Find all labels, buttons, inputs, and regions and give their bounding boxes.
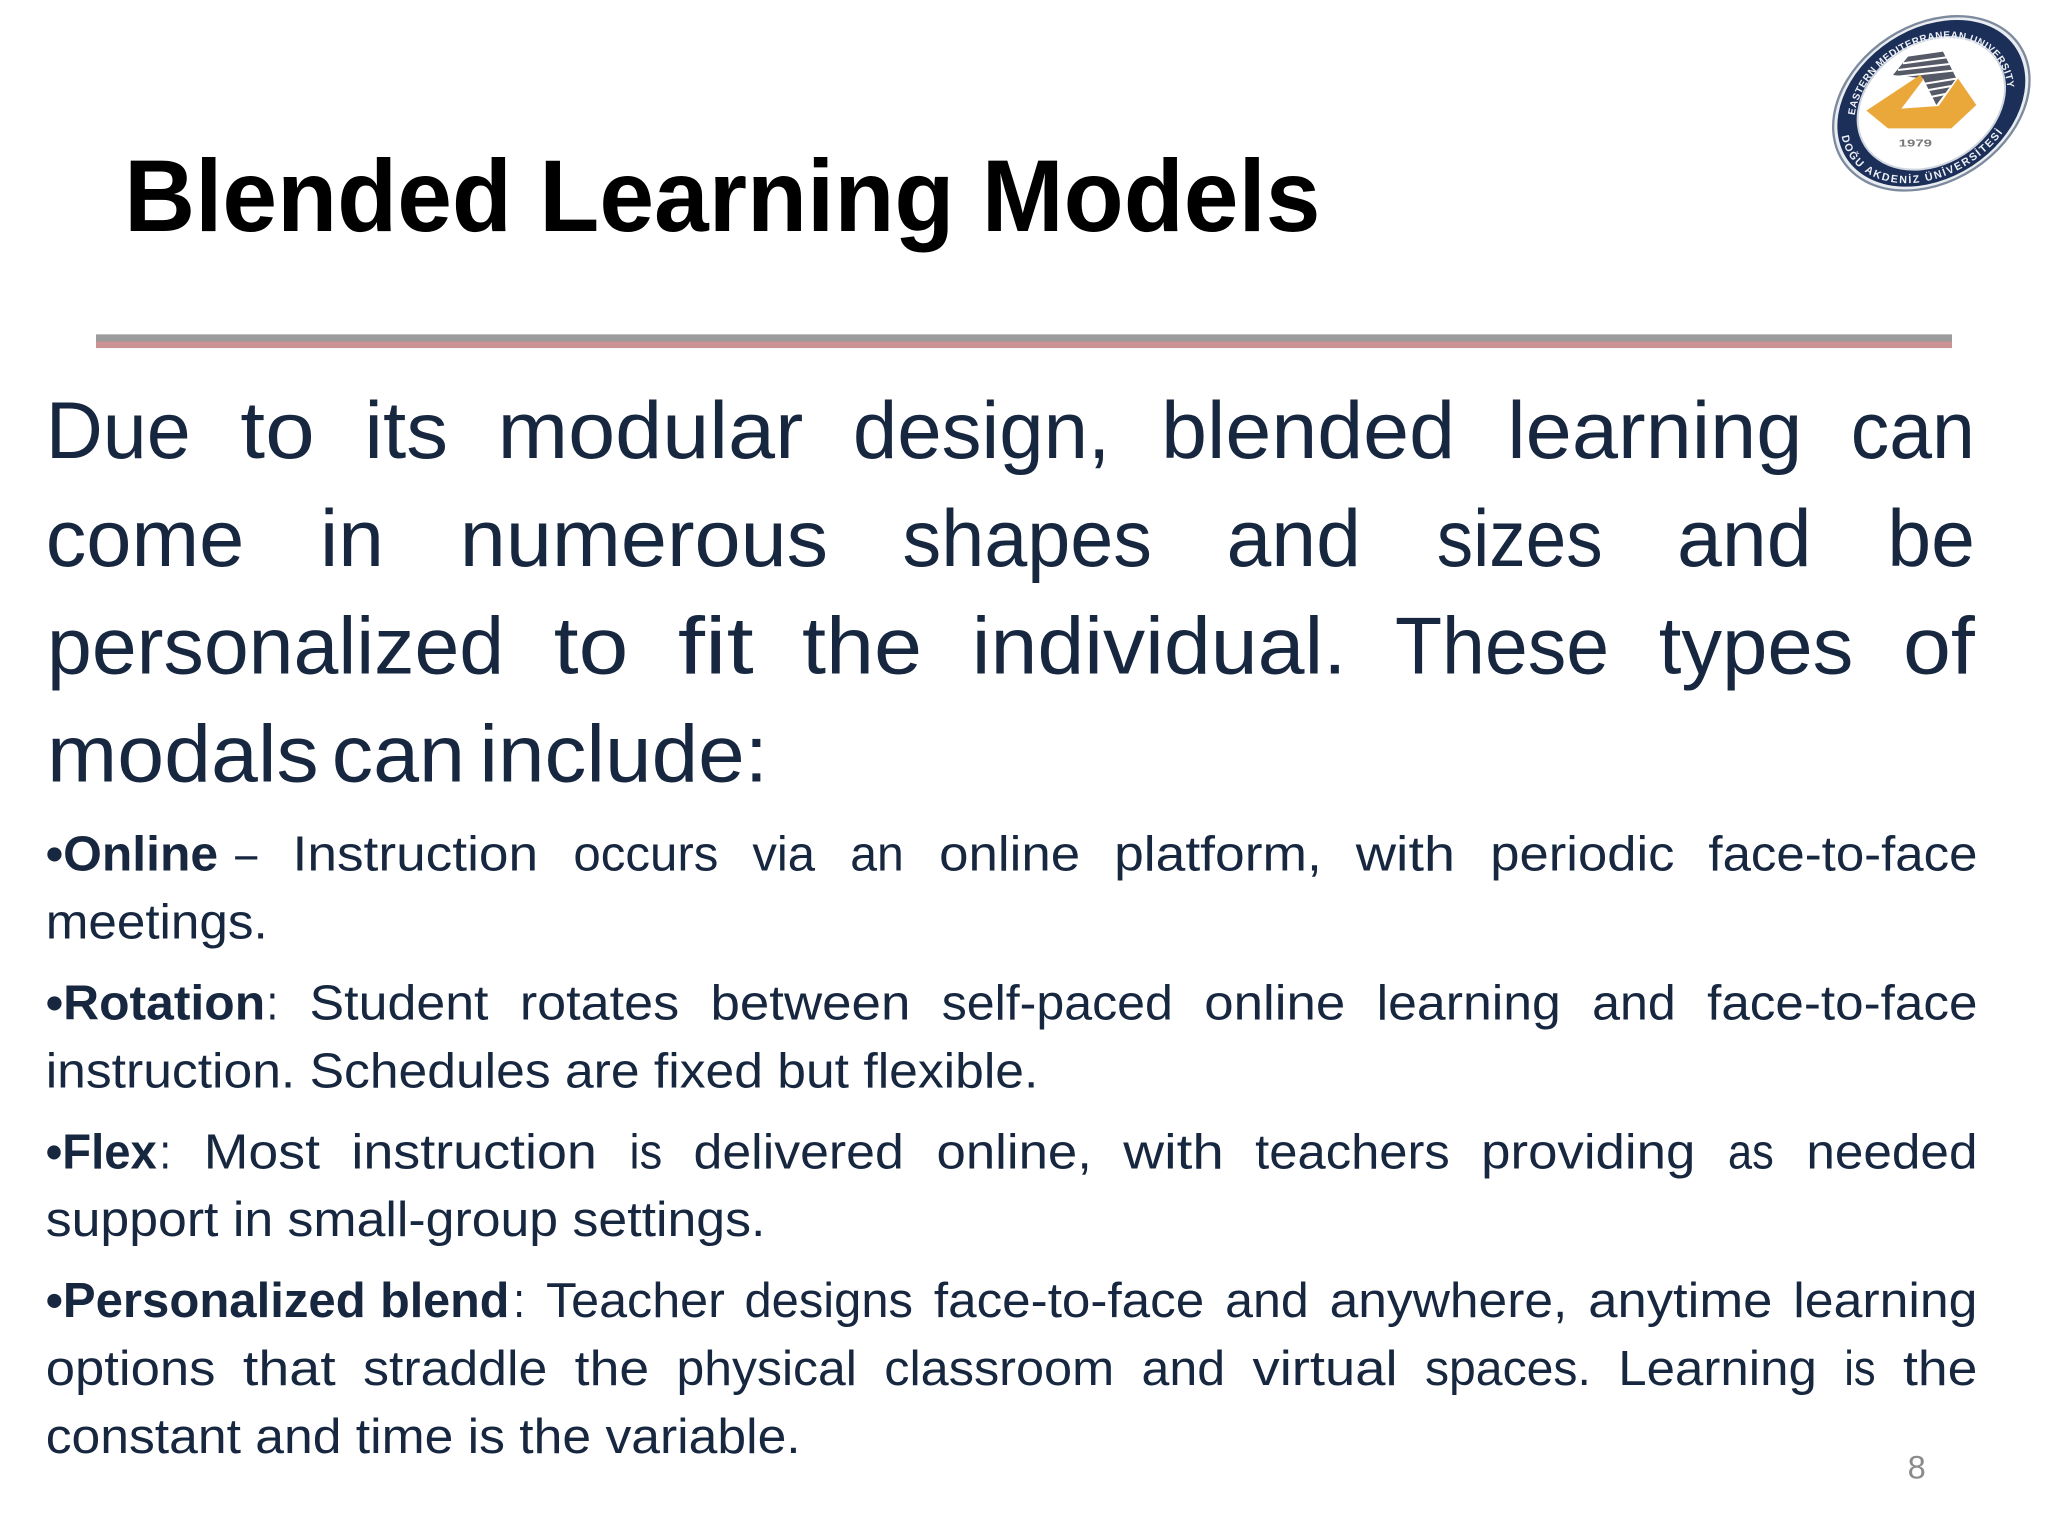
bullet: Personalized blend: straddle	[363, 1342, 547, 1396]
title divider rule	[96, 334, 1952, 348]
bullet: Rotation: between	[711, 976, 910, 1030]
page number: 8	[1908, 1449, 1926, 1486]
title: Blended Learning Models	[124, 139, 1320, 253]
intro paragraph: shapes	[903, 494, 1152, 584]
bullet: Online: face-to-face	[1708, 828, 1977, 882]
bullet: Personalized blend: spaces.	[1425, 1342, 1591, 1396]
icon: university logo: 1979	[1899, 139, 1933, 150]
bullet: Personalized blend: options	[46, 1342, 216, 1396]
bullet: Personalized blend: constant and time is the variable.	[46, 1410, 801, 1464]
bullet: Online: meetings.	[46, 895, 268, 949]
intro paragraph: can	[332, 710, 465, 800]
intro paragraph: and	[1677, 494, 1812, 584]
bullet: Rotation: face-to-face	[1707, 976, 1977, 1030]
bullet: Rotation: :	[266, 976, 278, 1030]
icon: university logo: DOĞU AKDENİZ ÜNİVERSİTESİ	[1842, 128, 2002, 184]
icon: university logo: EASTERN MEDITERRANEAN UNIVERSITY	[1848, 31, 2014, 115]
bullet: Flex: Most	[204, 1125, 320, 1179]
intro paragraph: can	[1851, 386, 1975, 476]
bullet: Personalized blend: •Personalized	[46, 1274, 366, 1328]
intro paragraph: modals	[47, 710, 319, 800]
bullet: Personalized blend: physical	[677, 1342, 857, 1396]
bullet: Flex: :	[159, 1125, 171, 1179]
bullet: Flex	[46, 1125, 1977, 1247]
intro paragraph: personalized	[47, 601, 504, 691]
bullet: Rotation	[46, 976, 1977, 1098]
intro paragraph: design,	[853, 386, 1110, 476]
intro paragraph: to	[554, 601, 628, 691]
bullet: Flex: teachers	[1255, 1125, 1450, 1179]
intro paragraph: to	[240, 386, 315, 476]
bullet: Personalized blend: Teacher	[546, 1274, 725, 1328]
bullet: Flex: instruction	[351, 1125, 597, 1179]
bullet: Rotation: self-paced	[942, 976, 1173, 1030]
bullet: Personalized blend: and	[1142, 1342, 1225, 1396]
bullet: Personalized blend: the	[575, 1342, 649, 1396]
bullet: Flex: delivered	[694, 1125, 904, 1179]
intro paragraph: fit	[678, 601, 754, 691]
bullet: Personalized blend: anytime	[1588, 1274, 1772, 1328]
bullet: Flex: as	[1728, 1125, 1774, 1179]
bullet: Rotation: online	[1204, 976, 1345, 1030]
bullet: Rotation: rotates	[520, 976, 679, 1030]
intro paragraph: be	[1887, 494, 1975, 584]
bullet: Personalized blend: anywhere,	[1330, 1274, 1567, 1328]
bullet: Personalized blend: virtual	[1253, 1342, 1398, 1396]
intro paragraph: sizes	[1437, 494, 1603, 584]
intro paragraph: of	[1903, 601, 1975, 691]
bullet: Flex: providing	[1481, 1125, 1695, 1179]
intro paragraph: types	[1659, 601, 1853, 691]
bullet: Rotation: and	[1592, 976, 1676, 1030]
bullet: Personalized blend: face-to-face	[934, 1274, 1204, 1328]
intro paragraph: include:	[479, 710, 768, 800]
bullet: Personalized blend: and	[1225, 1274, 1309, 1328]
bullet: Personalized blend: designs	[744, 1274, 913, 1328]
bullet: Online: Instruction	[293, 828, 538, 882]
bullet: Online: platform,	[1114, 828, 1322, 882]
bullet: Rotation: •Rotation	[46, 976, 265, 1030]
icon: university logo	[1832, 15, 2031, 192]
bullet: Personalized blend: classroom	[884, 1342, 1114, 1396]
intro paragraph: blended	[1161, 386, 1455, 476]
intro paragraph: the	[802, 601, 922, 691]
intro paragraph: come	[46, 494, 244, 584]
bullet: Personalized blend: that	[243, 1342, 336, 1396]
intro paragraph: learning	[1507, 386, 1802, 476]
bullet: Online: via	[752, 828, 816, 882]
bullet: Rotation: instruction. Schedules are fixed but flexible.	[46, 1044, 1038, 1098]
bullet: Personalized blend: Learning	[1618, 1342, 1817, 1396]
bullet: Online: –	[235, 828, 258, 882]
bullet: Personalized blend: is	[1844, 1342, 1876, 1396]
intro paragraph: Due	[46, 386, 191, 476]
bullet: Flex: with	[1122, 1125, 1224, 1179]
bullet: Online	[46, 828, 1977, 949]
bullet: Online: with	[1355, 828, 1455, 882]
bullet: Rotation: learning	[1377, 976, 1561, 1030]
bullet: Personalized blend: :	[513, 1274, 525, 1328]
bullet: Flex: •Flex	[46, 1125, 157, 1179]
intro paragraph: modular	[498, 386, 803, 476]
bullet: Flex: is	[630, 1125, 662, 1179]
intro paragraph: in	[320, 494, 384, 584]
bullet: Online: periodic	[1490, 828, 1674, 882]
bullet: Online: online	[939, 828, 1080, 882]
bullet: Personalized blend: blend	[380, 1274, 509, 1328]
bullet: Personalized blend: the	[1903, 1342, 1977, 1396]
bullet: Personalized blend: learning	[1793, 1274, 1977, 1328]
intro paragraph: and	[1226, 494, 1361, 584]
bullet: Online: occurs	[573, 828, 718, 882]
bullet: Flex: online,	[936, 1125, 1092, 1179]
intro paragraph	[46, 386, 1975, 800]
bullet: Rotation: Student	[310, 976, 489, 1030]
intro paragraph: individual.	[972, 601, 1347, 691]
bullet: Online: •Online	[46, 828, 218, 882]
intro paragraph: numerous	[460, 494, 828, 584]
bullet: Flex: support in small-group settings.	[46, 1193, 765, 1247]
intro paragraph: These	[1395, 601, 1609, 691]
intro paragraph: its	[364, 386, 448, 476]
bullet: Flex: needed	[1806, 1125, 1977, 1179]
bullet: Online: an	[850, 828, 904, 882]
bullet: Personalized blend	[46, 1274, 1977, 1464]
